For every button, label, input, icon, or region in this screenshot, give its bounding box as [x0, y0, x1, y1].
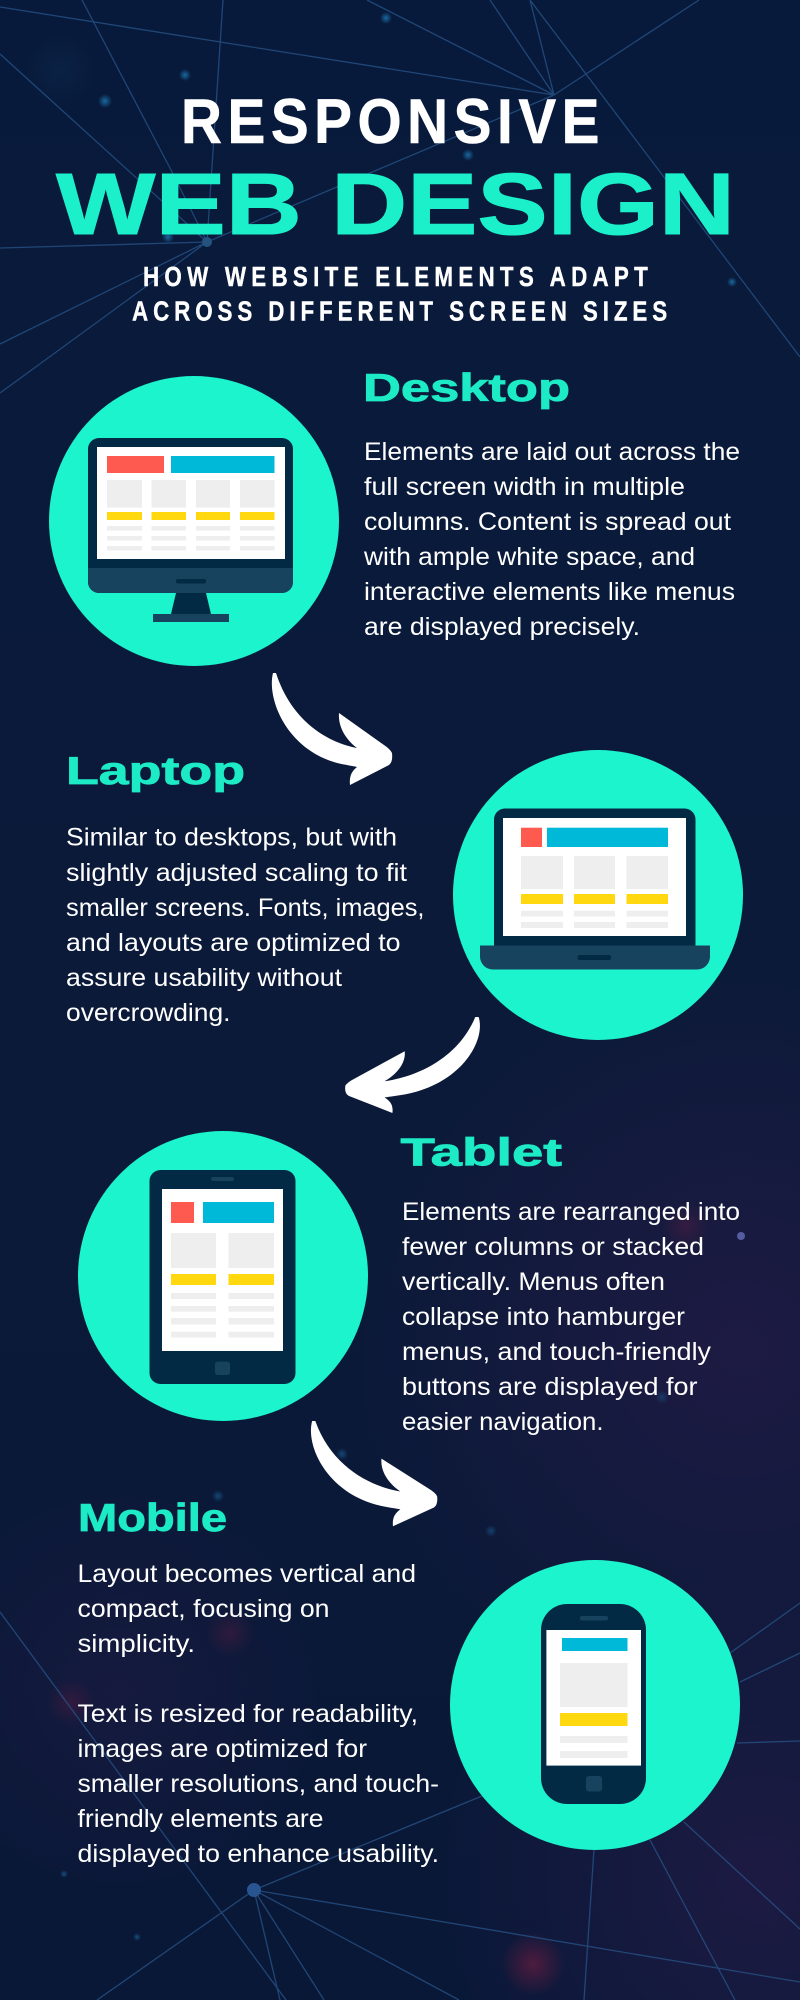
text: desktop description: Elements are laid out across the [364, 438, 740, 466]
title [56, 86, 735, 253]
icon: tablet [78, 1131, 368, 1421]
text: tablet description: menus, and touch-friendly [402, 1338, 712, 1366]
text: mobile description: Layout becomes vertical and [78, 1560, 416, 1588]
text: laptop description [66, 824, 424, 1027]
title: WEB DESIGN [56, 156, 735, 253]
heading: desktop: Desktop [363, 367, 570, 410]
text: desktop description [363, 438, 740, 641]
text: mobile description: displayed to enhance usability. [78, 1840, 439, 1868]
title: RESPONSIVE [181, 86, 600, 157]
subtitle: ACROSS DIFFERENT SCREEN SIZES [132, 296, 667, 327]
text: desktop description: with ample white space, and [363, 543, 695, 571]
text: tablet description: buttons are displayed for [402, 1373, 698, 1401]
panel: mobile [78, 1497, 740, 1868]
text: mobile description: smaller resolutions, and touch- [78, 1770, 439, 1798]
icon: laptop [453, 750, 743, 1040]
heading: laptop: Laptop [66, 750, 245, 793]
text: laptop description: Similar to desktops, but with [66, 824, 397, 852]
subtitle: HOW WEBSITE ELEMENTS ADAPT [143, 262, 648, 293]
panel: tablet [78, 1131, 740, 1436]
text: laptop description: smaller screens. Fonts, images, [66, 894, 424, 922]
text: desktop description: are displayed precisely. [364, 613, 640, 641]
text: mobile description: images are optimized for [78, 1735, 367, 1763]
text: mobile description [78, 1560, 439, 1868]
text: desktop description: interactive elements like menus [364, 578, 735, 606]
text: tablet description [402, 1198, 740, 1436]
arrow: desktop to laptop [272, 673, 392, 785]
subtitle [132, 262, 667, 327]
text: mobile description: Text is resized for readability, [78, 1700, 418, 1728]
arrow: tablet to mobile [311, 1421, 437, 1526]
text: desktop description: columns. Content is spread out [364, 508, 731, 536]
text: tablet description: collapse into hamburger [402, 1303, 685, 1331]
arrow: laptop to tablet [345, 1017, 480, 1113]
text: tablet description: vertically. Menus often [402, 1268, 665, 1296]
text: laptop description: slightly adjusted scaling to fit [66, 859, 407, 887]
panel: desktop [49, 367, 740, 666]
text: mobile description: compact, focusing on [78, 1595, 330, 1623]
text: tablet description: easier navigation. [402, 1408, 604, 1436]
text: laptop description: assure usability without [66, 964, 342, 992]
text: tablet description: fewer columns or stacked [402, 1233, 704, 1261]
heading: tablet: Tablet [400, 1132, 562, 1175]
icon: mobile phone [450, 1560, 740, 1850]
icon: desktop monitor [49, 376, 339, 666]
text: tablet description: Elements are rearranged into [402, 1198, 740, 1226]
text: laptop description: and layouts are optimized to [66, 929, 400, 957]
text: laptop description: overcrowding. [66, 999, 230, 1027]
panel: laptop [66, 750, 743, 1040]
text: mobile description: friendly elements are [78, 1805, 324, 1833]
text: mobile description: simplicity. [78, 1630, 195, 1658]
text: desktop description: full screen width in multiple [364, 473, 685, 501]
heading: mobile: Mobile [78, 1497, 227, 1540]
